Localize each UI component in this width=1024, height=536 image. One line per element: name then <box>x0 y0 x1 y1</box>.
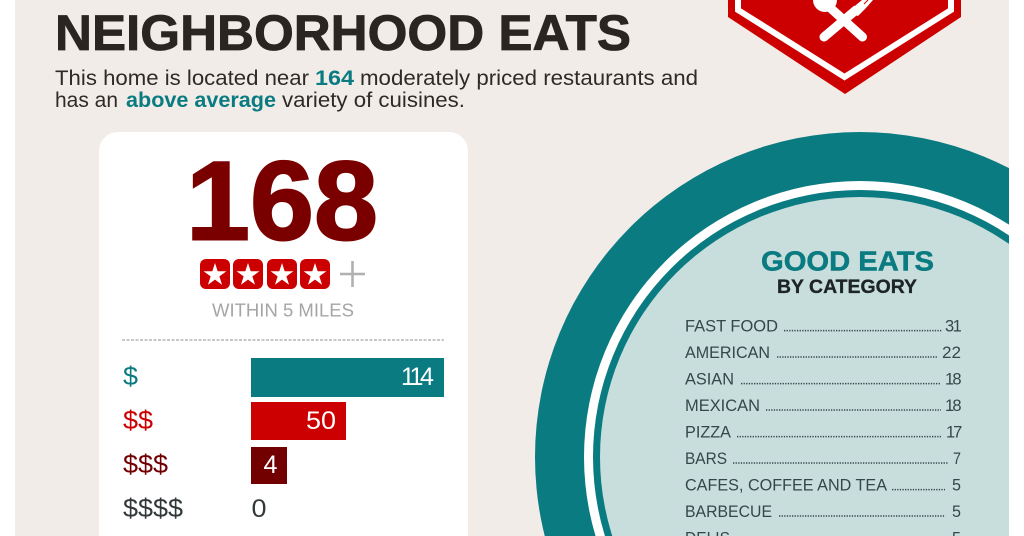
category list: FAST FOOD <box>685 317 778 335</box>
category list: BARS <box>685 450 727 468</box>
panel: restaurant count card <box>99 132 468 536</box>
bar chart: price tiers: $$$$ <box>123 493 184 523</box>
category list: 31 <box>945 317 962 335</box>
category list: PIZZA <box>685 423 731 441</box>
intro text: above average <box>126 89 276 112</box>
category list: 5 <box>952 476 961 494</box>
category list: CAFES, COFFEE AND TEA <box>685 476 887 494</box>
category list: ASIAN <box>685 370 734 388</box>
bar chart: price tiers: $$ <box>123 405 154 435</box>
panel: good eats circle <box>535 132 1024 536</box>
intro text: has an <box>55 89 118 112</box>
intro text: variety of cuisines. <box>282 89 465 112</box>
intro text: moderately priced restaurants and <box>360 67 698 90</box>
bar chart: price tiers: 4 <box>264 451 278 479</box>
heading: good eats: GOOD EATS <box>761 246 934 276</box>
bar chart: price tiers: 50 <box>306 407 336 435</box>
title: NEIGHBORHOOD EATS <box>55 4 631 61</box>
category list: 22 <box>942 344 961 362</box>
total count: 168 <box>186 138 378 264</box>
bar chart: price tiers: $ <box>123 361 139 391</box>
bar chart: price tiers: 114 <box>401 363 434 391</box>
category list: 17 <box>946 423 962 441</box>
category list: AMERICAN <box>685 344 770 362</box>
category list: 5 <box>952 503 961 521</box>
intro text <box>55 67 698 112</box>
bar chart: price tiers <box>123 358 444 523</box>
intro text: 164 <box>315 67 354 90</box>
category list: 18 <box>945 370 961 388</box>
icon: restaurant badge with fork and spoon <box>728 0 961 94</box>
category list: 18 <box>945 397 961 415</box>
distance caption: WITHIN 5 MILES <box>212 300 354 320</box>
category list: BARBECUE <box>685 503 772 521</box>
intro text: This home is located near <box>55 67 309 90</box>
icon: star rating <box>200 259 365 289</box>
category list <box>685 317 962 536</box>
subheading: by category: BY CATEGORY <box>777 276 917 298</box>
category list: 7 <box>953 450 961 468</box>
bar chart: price tiers: $$$ <box>123 449 169 479</box>
category list: MEXICAN <box>685 397 760 415</box>
bar chart: price tiers: 0 <box>252 495 266 523</box>
